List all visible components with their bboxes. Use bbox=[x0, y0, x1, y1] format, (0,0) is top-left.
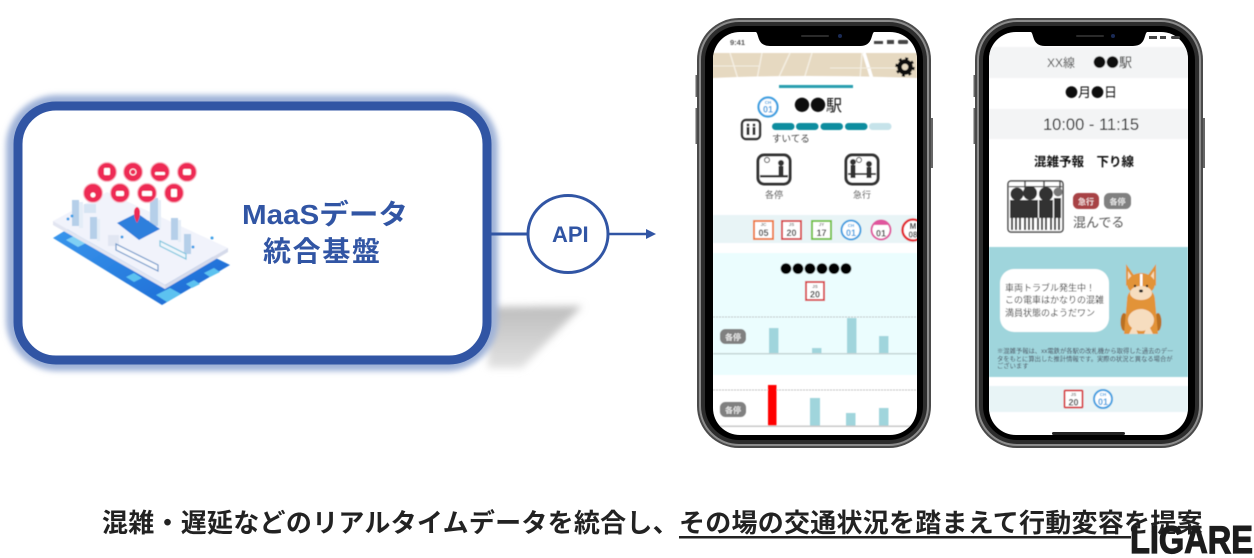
platform title: 統合基盤 bbox=[263, 236, 380, 267]
chart panel: bottom bbox=[713, 385, 917, 427]
API label: API bbox=[552, 222, 589, 247]
trains bbox=[116, 244, 158, 271]
station name: ●●駅 bbox=[794, 92, 842, 116]
congestion label: すいてる bbox=[772, 134, 810, 145]
local train label: 各停 bbox=[765, 189, 783, 200]
line selector band bbox=[989, 386, 1188, 412]
express train icon bbox=[846, 155, 878, 184]
isometric city illustration bbox=[53, 162, 230, 305]
disclaimer note: ※混雑予報は、xx電鉄が各駅の改札機から取得した過去のデー bbox=[997, 346, 1173, 355]
congestion bars bbox=[768, 385, 888, 426]
local tag bbox=[1104, 193, 1131, 209]
local train tag bbox=[720, 402, 746, 417]
phone: congestion forecast screen bbox=[974, 18, 1205, 448]
box glow bbox=[13, 102, 491, 364]
disclaimer note: タをもとに算出した推計情報です。実際の状況と異なる場合が bbox=[997, 354, 1173, 363]
API connector bbox=[490, 196, 656, 272]
blue circuit layer bbox=[53, 205, 230, 305]
home indicator bbox=[1052, 432, 1125, 435]
API circle bbox=[528, 196, 608, 272]
line badges: 05 bbox=[758, 228, 769, 238]
rounded box bbox=[18, 106, 487, 360]
phone body bbox=[974, 18, 1205, 448]
line badge M: M bbox=[910, 222, 917, 231]
status icons bbox=[1149, 36, 1180, 39]
line badges: JC bbox=[761, 222, 767, 227]
disclaimer note: ございます bbox=[997, 361, 1028, 370]
line badges bbox=[1064, 390, 1112, 408]
chart panel: top bbox=[713, 253, 917, 375]
phone: station congestion screen bbox=[696, 18, 933, 448]
arrow bbox=[609, 229, 656, 239]
line badges: CH bbox=[1100, 392, 1106, 397]
blue dots bbox=[66, 214, 214, 248]
congestion bars bbox=[769, 318, 888, 354]
station badge: CH bbox=[765, 100, 771, 105]
message panel bbox=[989, 247, 1188, 377]
date: ●月●日 bbox=[1065, 82, 1117, 101]
settings gear icon bbox=[896, 58, 914, 76]
line badges: JY bbox=[819, 222, 824, 227]
time band: 10:00 - 11:15 bbox=[1043, 116, 1139, 134]
local train tag: 各停 bbox=[725, 332, 741, 342]
congestion label: 混んでる bbox=[1073, 215, 1124, 230]
speech bubble: この電車はかなりの混雑 bbox=[1005, 294, 1104, 305]
platform title: MaaSデータ bbox=[242, 198, 408, 230]
local train icon bbox=[758, 155, 790, 184]
screen content bbox=[705, 38, 924, 427]
notch bbox=[1031, 32, 1147, 46]
congestion icon bbox=[742, 120, 760, 139]
line badges bbox=[754, 220, 890, 240]
buildings bbox=[72, 200, 79, 226]
line badges: CH bbox=[848, 223, 854, 228]
line selector band bbox=[713, 215, 917, 243]
line badges: 01 bbox=[876, 228, 886, 238]
crowded train icon bbox=[1008, 181, 1063, 232]
status time: 9:41 bbox=[730, 38, 745, 47]
time band bbox=[989, 109, 1188, 139]
local train tag: 各停 bbox=[725, 405, 741, 415]
route badge: JS bbox=[812, 284, 818, 289]
map header bbox=[705, 53, 917, 80]
speaker and camera bbox=[801, 34, 842, 38]
express tag bbox=[1073, 193, 1099, 209]
caption underline bbox=[679, 536, 1131, 538]
route badge bbox=[806, 282, 824, 300]
line badges: JS bbox=[789, 222, 794, 227]
central blue plate and pin bbox=[117, 213, 160, 240]
header band: line and station: XX線 bbox=[1047, 55, 1075, 70]
forecast heading: 混雑予報 下り線 bbox=[1034, 154, 1134, 169]
header band: line and station bbox=[989, 47, 1188, 78]
speech bubble: 車両トラブル発生中！ bbox=[1005, 282, 1095, 293]
status icons bbox=[874, 40, 908, 44]
congestion meter bbox=[772, 123, 892, 130]
line badge M bbox=[902, 220, 924, 240]
route name: ●●●●●● bbox=[780, 260, 852, 277]
route badge: 20 bbox=[810, 290, 820, 300]
header band: line and station: ●●駅 bbox=[1093, 52, 1132, 71]
speech bubble: 満員状態のようだワン bbox=[1005, 307, 1095, 318]
line badges: 17 bbox=[816, 228, 827, 238]
white city layer bbox=[53, 192, 228, 285]
caption: 混雑・遅延などのリアルタイムデータを統合し、その場の交通状況を踏まえて行動変容を提案 bbox=[102, 508, 1203, 538]
line badges: 01 bbox=[846, 228, 856, 238]
local train tag bbox=[720, 329, 746, 344]
speaker and camera bbox=[1076, 34, 1115, 38]
phone body bbox=[696, 18, 933, 448]
box shadow bbox=[488, 306, 582, 368]
notch bbox=[756, 32, 874, 46]
screen content bbox=[989, 47, 1188, 412]
platform title bbox=[242, 198, 408, 267]
line badges: 20 bbox=[1068, 398, 1079, 408]
line badge M: 08 bbox=[909, 230, 918, 240]
station badge bbox=[758, 98, 778, 116]
express tag: 急行 bbox=[1078, 196, 1094, 206]
panel: MaaS data platform bbox=[13, 102, 582, 368]
express train label: 急行 bbox=[853, 189, 871, 200]
station badge: 01 bbox=[763, 104, 773, 114]
line badges: 01 bbox=[1098, 397, 1108, 407]
red transport icons bbox=[98, 162, 116, 182]
dog mascot bbox=[1120, 264, 1162, 334]
local tag: 各停 bbox=[1110, 196, 1126, 206]
sheet handle bbox=[779, 85, 853, 88]
speech bubble bbox=[1000, 269, 1109, 332]
line badges: 20 bbox=[786, 228, 797, 238]
line badges: JS bbox=[1071, 392, 1076, 397]
